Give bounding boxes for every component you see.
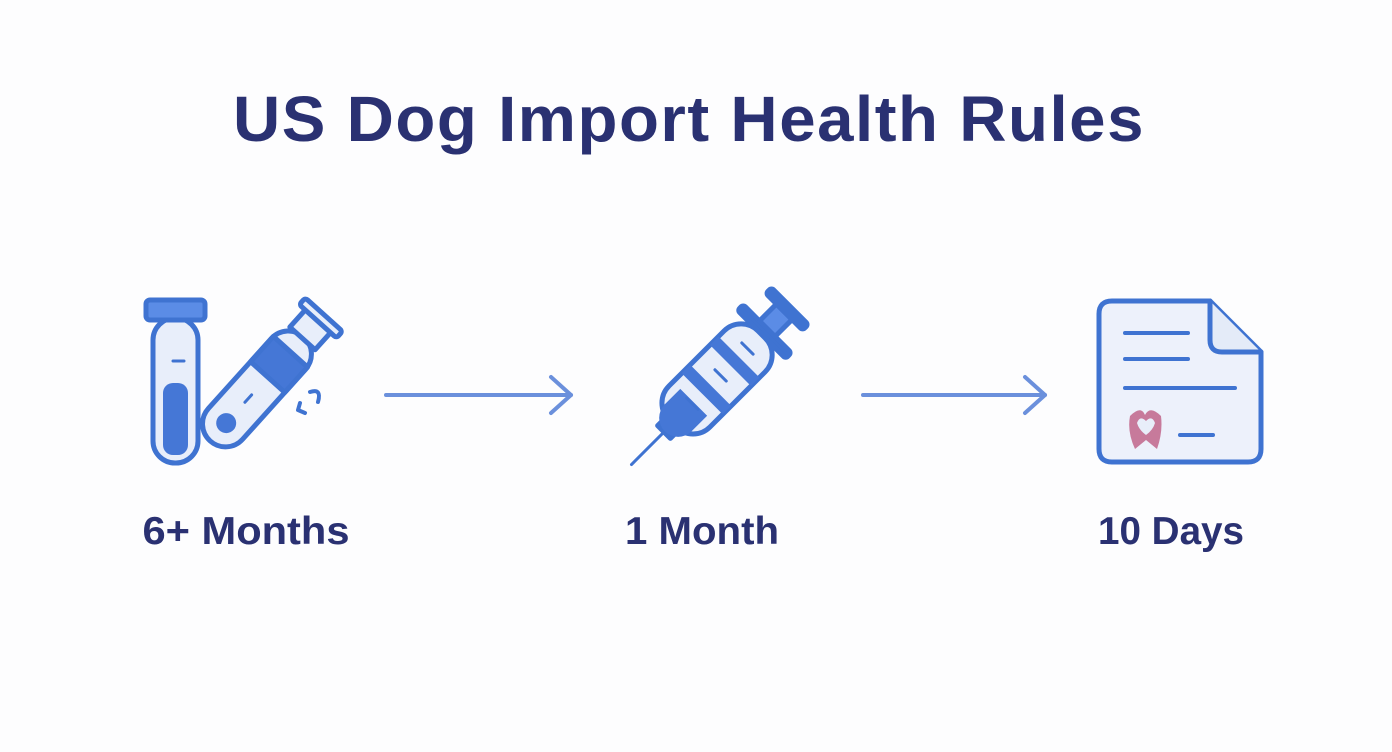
label: 1 Month: 1 Month xyxy=(625,510,779,553)
icon: health certificate xyxy=(1099,301,1261,462)
arrow 1 xyxy=(386,377,571,413)
icon: test tubes xyxy=(146,298,342,463)
title: US Dog Import Health Rules xyxy=(233,83,1145,155)
label: 10 Days: 10 Days xyxy=(1098,510,1244,553)
label: 6+ Months: 6+ Months xyxy=(142,510,350,553)
icon: syringe xyxy=(607,282,814,489)
arrow 2 xyxy=(863,377,1045,413)
